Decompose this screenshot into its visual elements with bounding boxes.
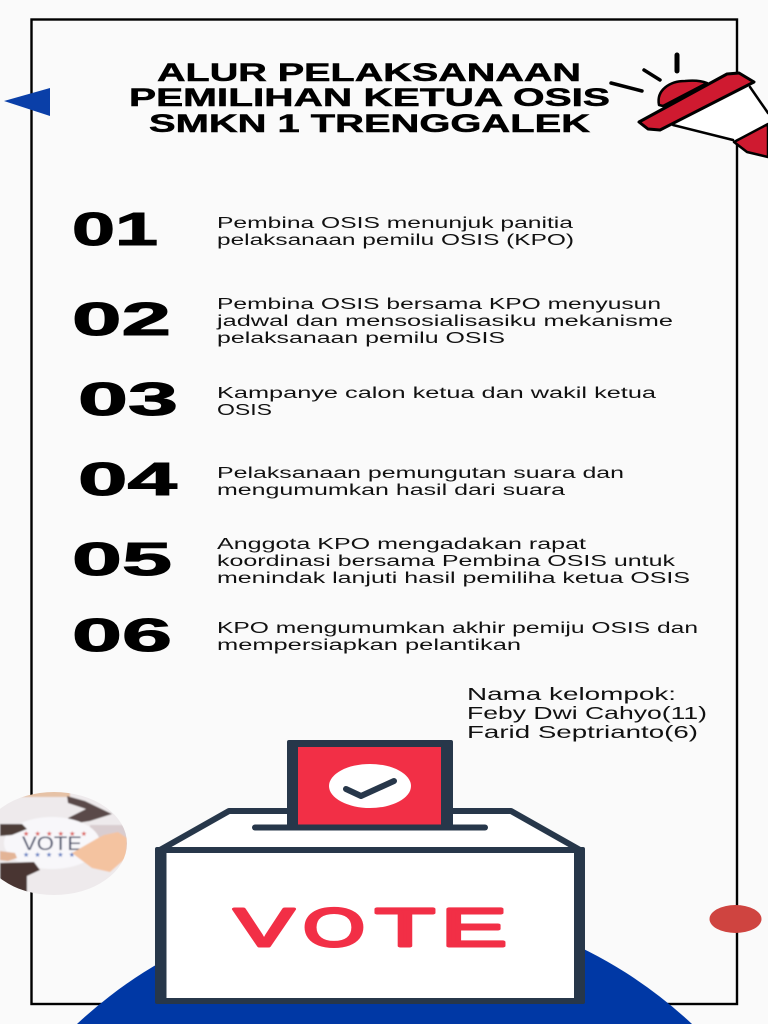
- group members: Nama kelompok:: [467, 684, 676, 704]
- step 01: Pembina OSIS menunjuk panitia: [217, 215, 574, 232]
- blue triangle: [4, 88, 50, 116]
- step 01: 01: [72, 203, 158, 255]
- VOTE label: O: [303, 898, 365, 958]
- step 04: 04: [78, 453, 178, 505]
- step 02: pelaksanaan pemilu OSIS: [217, 330, 505, 347]
- box lid: [160, 811, 580, 850]
- step 04: mengumumkan hasil dari suara: [217, 482, 566, 499]
- step 05: menindak lanjuti hasil pemiliha ketua OSIS: [217, 570, 690, 587]
- box body: [155, 847, 585, 1004]
- ballot paper: [287, 740, 453, 830]
- step 02: [72, 293, 673, 347]
- step 06: [72, 609, 698, 661]
- photo: hands holding vote sticker: ★ ★ ★ ★ ★: [23, 851, 75, 859]
- step 03: [78, 373, 657, 425]
- step 04: Pelaksanaan pemungutan suara dan: [217, 465, 624, 482]
- step 03: Kampanye calon ketua dan wakil ketua: [217, 385, 657, 402]
- step 05: 05: [72, 533, 172, 585]
- title: SMKN 1 TRENGGALEK: [149, 110, 590, 138]
- photo: hands holding vote sticker: ★ ★ ★ ★ ★ ★: [23, 830, 87, 838]
- photo: hands holding vote sticker: [0, 790, 130, 898]
- group members: Farid Septrianto(6): [467, 722, 698, 742]
- step 02: jadwal dan mensosialisasiku mekanisme: [215, 313, 673, 330]
- step 01: pelaksanaan pemilu OSIS (KPO): [217, 232, 574, 249]
- red dot: [710, 905, 762, 933]
- step 02: 02: [72, 293, 171, 345]
- photo: hands holding vote sticker: VOTE: [22, 834, 82, 855]
- ballot box: [155, 740, 585, 1004]
- VOTE label: V: [234, 898, 294, 958]
- title: PEMILIHAN KETUA OSIS: [129, 84, 610, 112]
- VOTE label: [234, 898, 507, 958]
- step 06: 06: [72, 609, 172, 661]
- ballot slot: [255, 824, 485, 830]
- title: [129, 59, 610, 138]
- step 05: koordinasi bersama Pembina OSIS untuk: [217, 553, 675, 570]
- step 05: Anggota KPO mengadakan rapat: [217, 536, 587, 553]
- step 06: KPO mengumumkan akhir pemiju OSIS dan: [217, 620, 698, 637]
- title: ALUR PELAKSANAAN: [157, 59, 581, 87]
- step 02: Pembina OSIS bersama KPO menyusun: [217, 296, 661, 313]
- group members: [467, 684, 707, 742]
- step 04: [78, 453, 624, 505]
- step 01: [72, 203, 574, 255]
- blue semicircle: [77, 903, 692, 1024]
- group members: Feby Dwi Cahyo(11): [467, 703, 707, 723]
- step 06: mempersiapkan pelantikan: [217, 637, 521, 654]
- step 05: [72, 533, 690, 587]
- VOTE label: T: [375, 898, 435, 958]
- step 03: OSIS: [217, 402, 272, 419]
- VOTE label: E: [441, 898, 507, 958]
- step 03: 03: [78, 373, 178, 425]
- icon: megaphone: [611, 55, 768, 157]
- check mark badge: [329, 764, 411, 808]
